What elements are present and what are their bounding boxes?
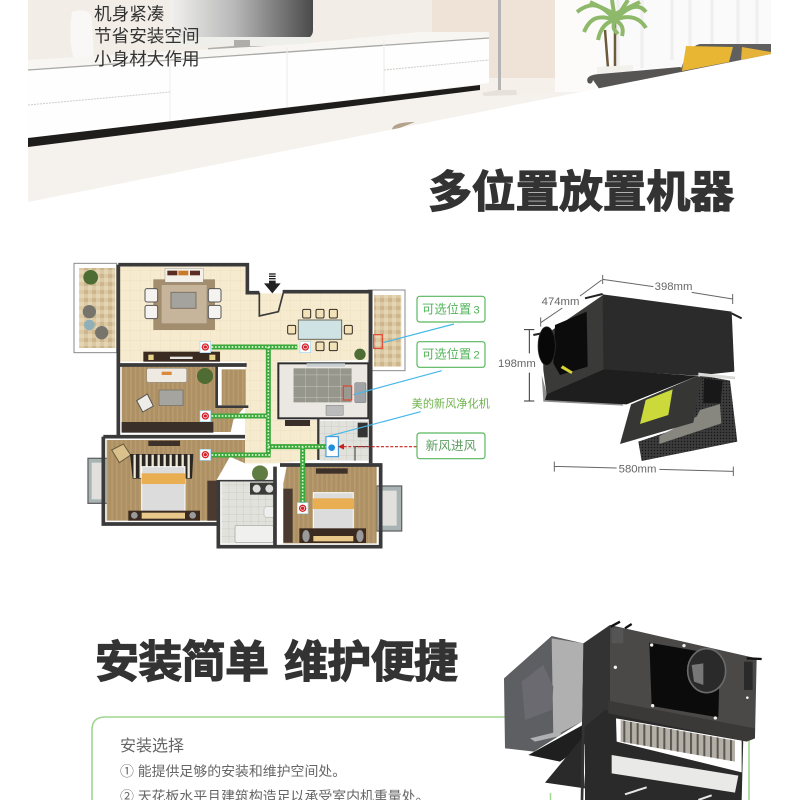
wall bbox=[28, 0, 432, 60]
white column bbox=[555, 0, 600, 92]
housing interior bbox=[585, 710, 743, 800]
label: optional position 3 bbox=[417, 296, 485, 322]
vase bbox=[70, 10, 94, 60]
hero caption bbox=[94, 4, 200, 69]
access door bbox=[620, 376, 702, 444]
kitchen bbox=[278, 363, 368, 426]
TV stand bbox=[208, 40, 266, 50]
install notes text: 安装选择 bbox=[120, 737, 184, 755]
air outlets bbox=[200, 342, 311, 514]
dimension labels: 580mm bbox=[619, 463, 656, 475]
inner panel line bbox=[550, 793, 552, 800]
electrical box bbox=[504, 636, 583, 752]
TV screen bbox=[178, 0, 313, 37]
install notes panel outline bbox=[92, 717, 749, 800]
leader lines bbox=[327, 324, 454, 437]
label: Midea fresh air purifier: 美的新风净化机 bbox=[412, 396, 490, 410]
outlet opening bbox=[614, 643, 749, 720]
unit body bbox=[533, 294, 742, 406]
install notes text bbox=[120, 737, 429, 800]
hero caption: 机身紧凑 bbox=[94, 4, 165, 24]
small washroom bbox=[320, 421, 368, 461]
label: optional position 3: 3 bbox=[473, 304, 480, 316]
optional position markers bbox=[343, 335, 382, 400]
floor lamp bbox=[498, 0, 501, 92]
label: optional position 2 bbox=[417, 342, 485, 367]
curtains bbox=[600, 0, 771, 75]
label: optional position 3: 可选位置 bbox=[422, 301, 471, 316]
round stool edge bbox=[392, 122, 415, 130]
purifier unit marker bbox=[326, 437, 338, 457]
cream floor area bbox=[120, 267, 368, 463]
filter and grille bbox=[638, 373, 737, 461]
cabinet black base bbox=[28, 85, 480, 147]
housing side bbox=[581, 625, 611, 800]
dimension labels: 198mm bbox=[498, 358, 536, 370]
dimension labels bbox=[498, 281, 692, 475]
heading: easy install and maintenance bbox=[95, 638, 458, 687]
hero caption: 节省安装空间 bbox=[94, 26, 200, 46]
warning label bbox=[640, 389, 673, 424]
green air ducts bbox=[212, 347, 327, 503]
bedroom 3 bbox=[283, 467, 377, 543]
title: multi-position placement: 多位置放置机器 bbox=[428, 168, 734, 217]
entrance arrow bbox=[264, 273, 281, 293]
label: fresh air intake bbox=[417, 433, 485, 459]
sofa bbox=[587, 67, 690, 90]
right balcony bbox=[368, 290, 405, 371]
right wall section bbox=[432, 0, 558, 81]
left balcony bbox=[74, 263, 117, 353]
dimension labels: 474mm bbox=[542, 296, 579, 308]
hero caption: 小身材大作用 bbox=[94, 49, 200, 69]
product photo: open unit bbox=[504, 622, 762, 800]
small balconies bbox=[88, 458, 402, 531]
hero photo: living room with TV cabinet bbox=[28, 0, 771, 210]
cabinet front bbox=[28, 38, 489, 138]
label: fresh air intake: 新风进风 bbox=[426, 438, 477, 453]
install notes text: ① 能提供足够的安装和维护空间处。 bbox=[120, 763, 346, 779]
product dimensions diagram bbox=[498, 275, 742, 476]
air inlet bbox=[538, 312, 588, 375]
label: optional position 2: 2 bbox=[473, 349, 480, 361]
filter pleats bbox=[616, 718, 742, 772]
red dashed intake arrow bbox=[338, 444, 417, 450]
bedroom 1 bbox=[122, 367, 246, 433]
floor plan bbox=[74, 263, 490, 547]
lower lip bbox=[608, 701, 755, 742]
label: optional position 2: 可选位置 bbox=[422, 346, 471, 361]
yellow pillows bbox=[682, 46, 733, 71]
lower flap bbox=[528, 710, 610, 788]
housing front bbox=[610, 625, 757, 737]
heading: easy install and maintenance: 安装简单 bbox=[95, 638, 269, 687]
mounting brackets bbox=[611, 622, 762, 690]
potted plant bbox=[577, 0, 646, 78]
dining table bbox=[288, 309, 366, 360]
dimension labels: 398mm bbox=[655, 281, 692, 293]
walls bbox=[103, 265, 381, 547]
heading: easy install and maintenance: 维护便捷 bbox=[284, 638, 458, 687]
bathroom bbox=[222, 465, 277, 543]
cabinet top bbox=[28, 32, 489, 70]
TV unit bbox=[143, 352, 220, 362]
white filter and frame bbox=[612, 755, 738, 800]
dimension lines bbox=[524, 275, 733, 476]
floor bbox=[28, 100, 539, 202]
rug and sofas bbox=[145, 268, 221, 330]
bedroom 2 bbox=[107, 440, 245, 521]
